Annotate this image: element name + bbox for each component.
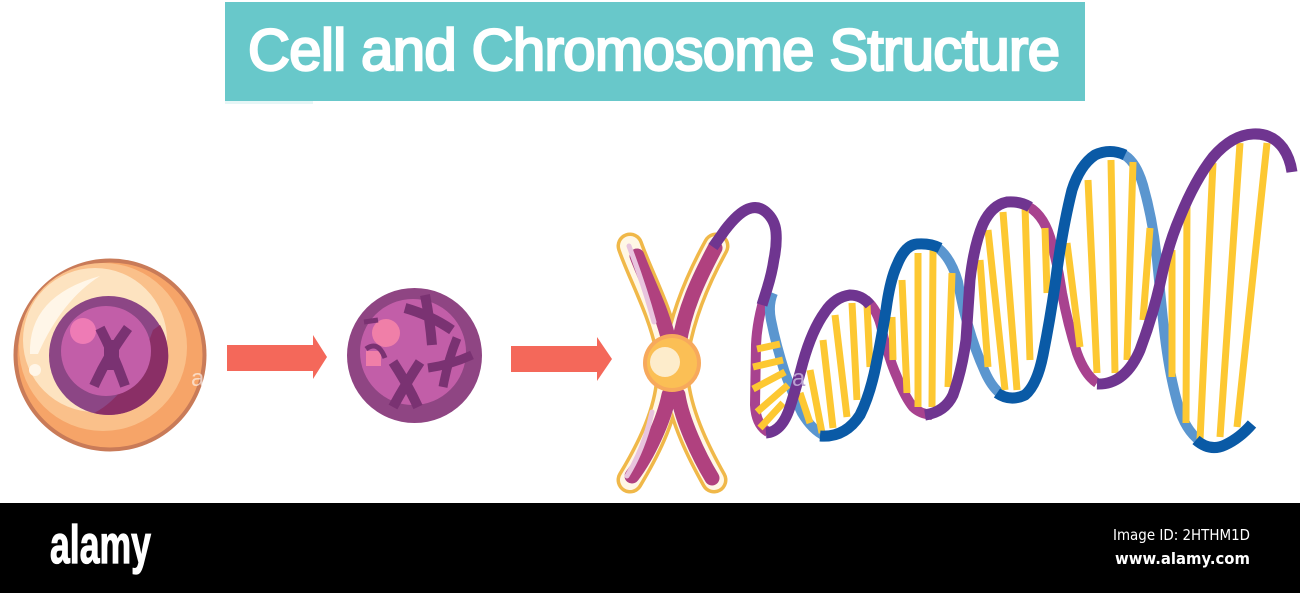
title banner: Cell and Chromosome Structure <box>248 18 1060 83</box>
back strands <box>755 153 1200 441</box>
title banner <box>225 2 1085 104</box>
arrow: nucleus to chromosome <box>511 337 612 381</box>
icon: X chromosome <box>627 246 716 480</box>
footer bar <box>0 503 1300 593</box>
image id: Image ID: 2HTHM1D <box>1113 526 1250 544</box>
icon: cell with nucleus: a <box>191 365 205 392</box>
icon: dividing nucleus with chromosomes <box>347 288 482 423</box>
watermark marks: a <box>792 365 806 392</box>
logo: alamy <box>50 515 151 575</box>
yellow base pairs <box>753 143 1267 440</box>
chart: DNA double helix <box>713 134 1292 448</box>
front strands <box>713 134 1292 448</box>
arrow: cell to nucleus <box>227 335 327 379</box>
website: www.alamy.com <box>1115 549 1250 568</box>
icon: cell with nucleus <box>14 258 206 452</box>
